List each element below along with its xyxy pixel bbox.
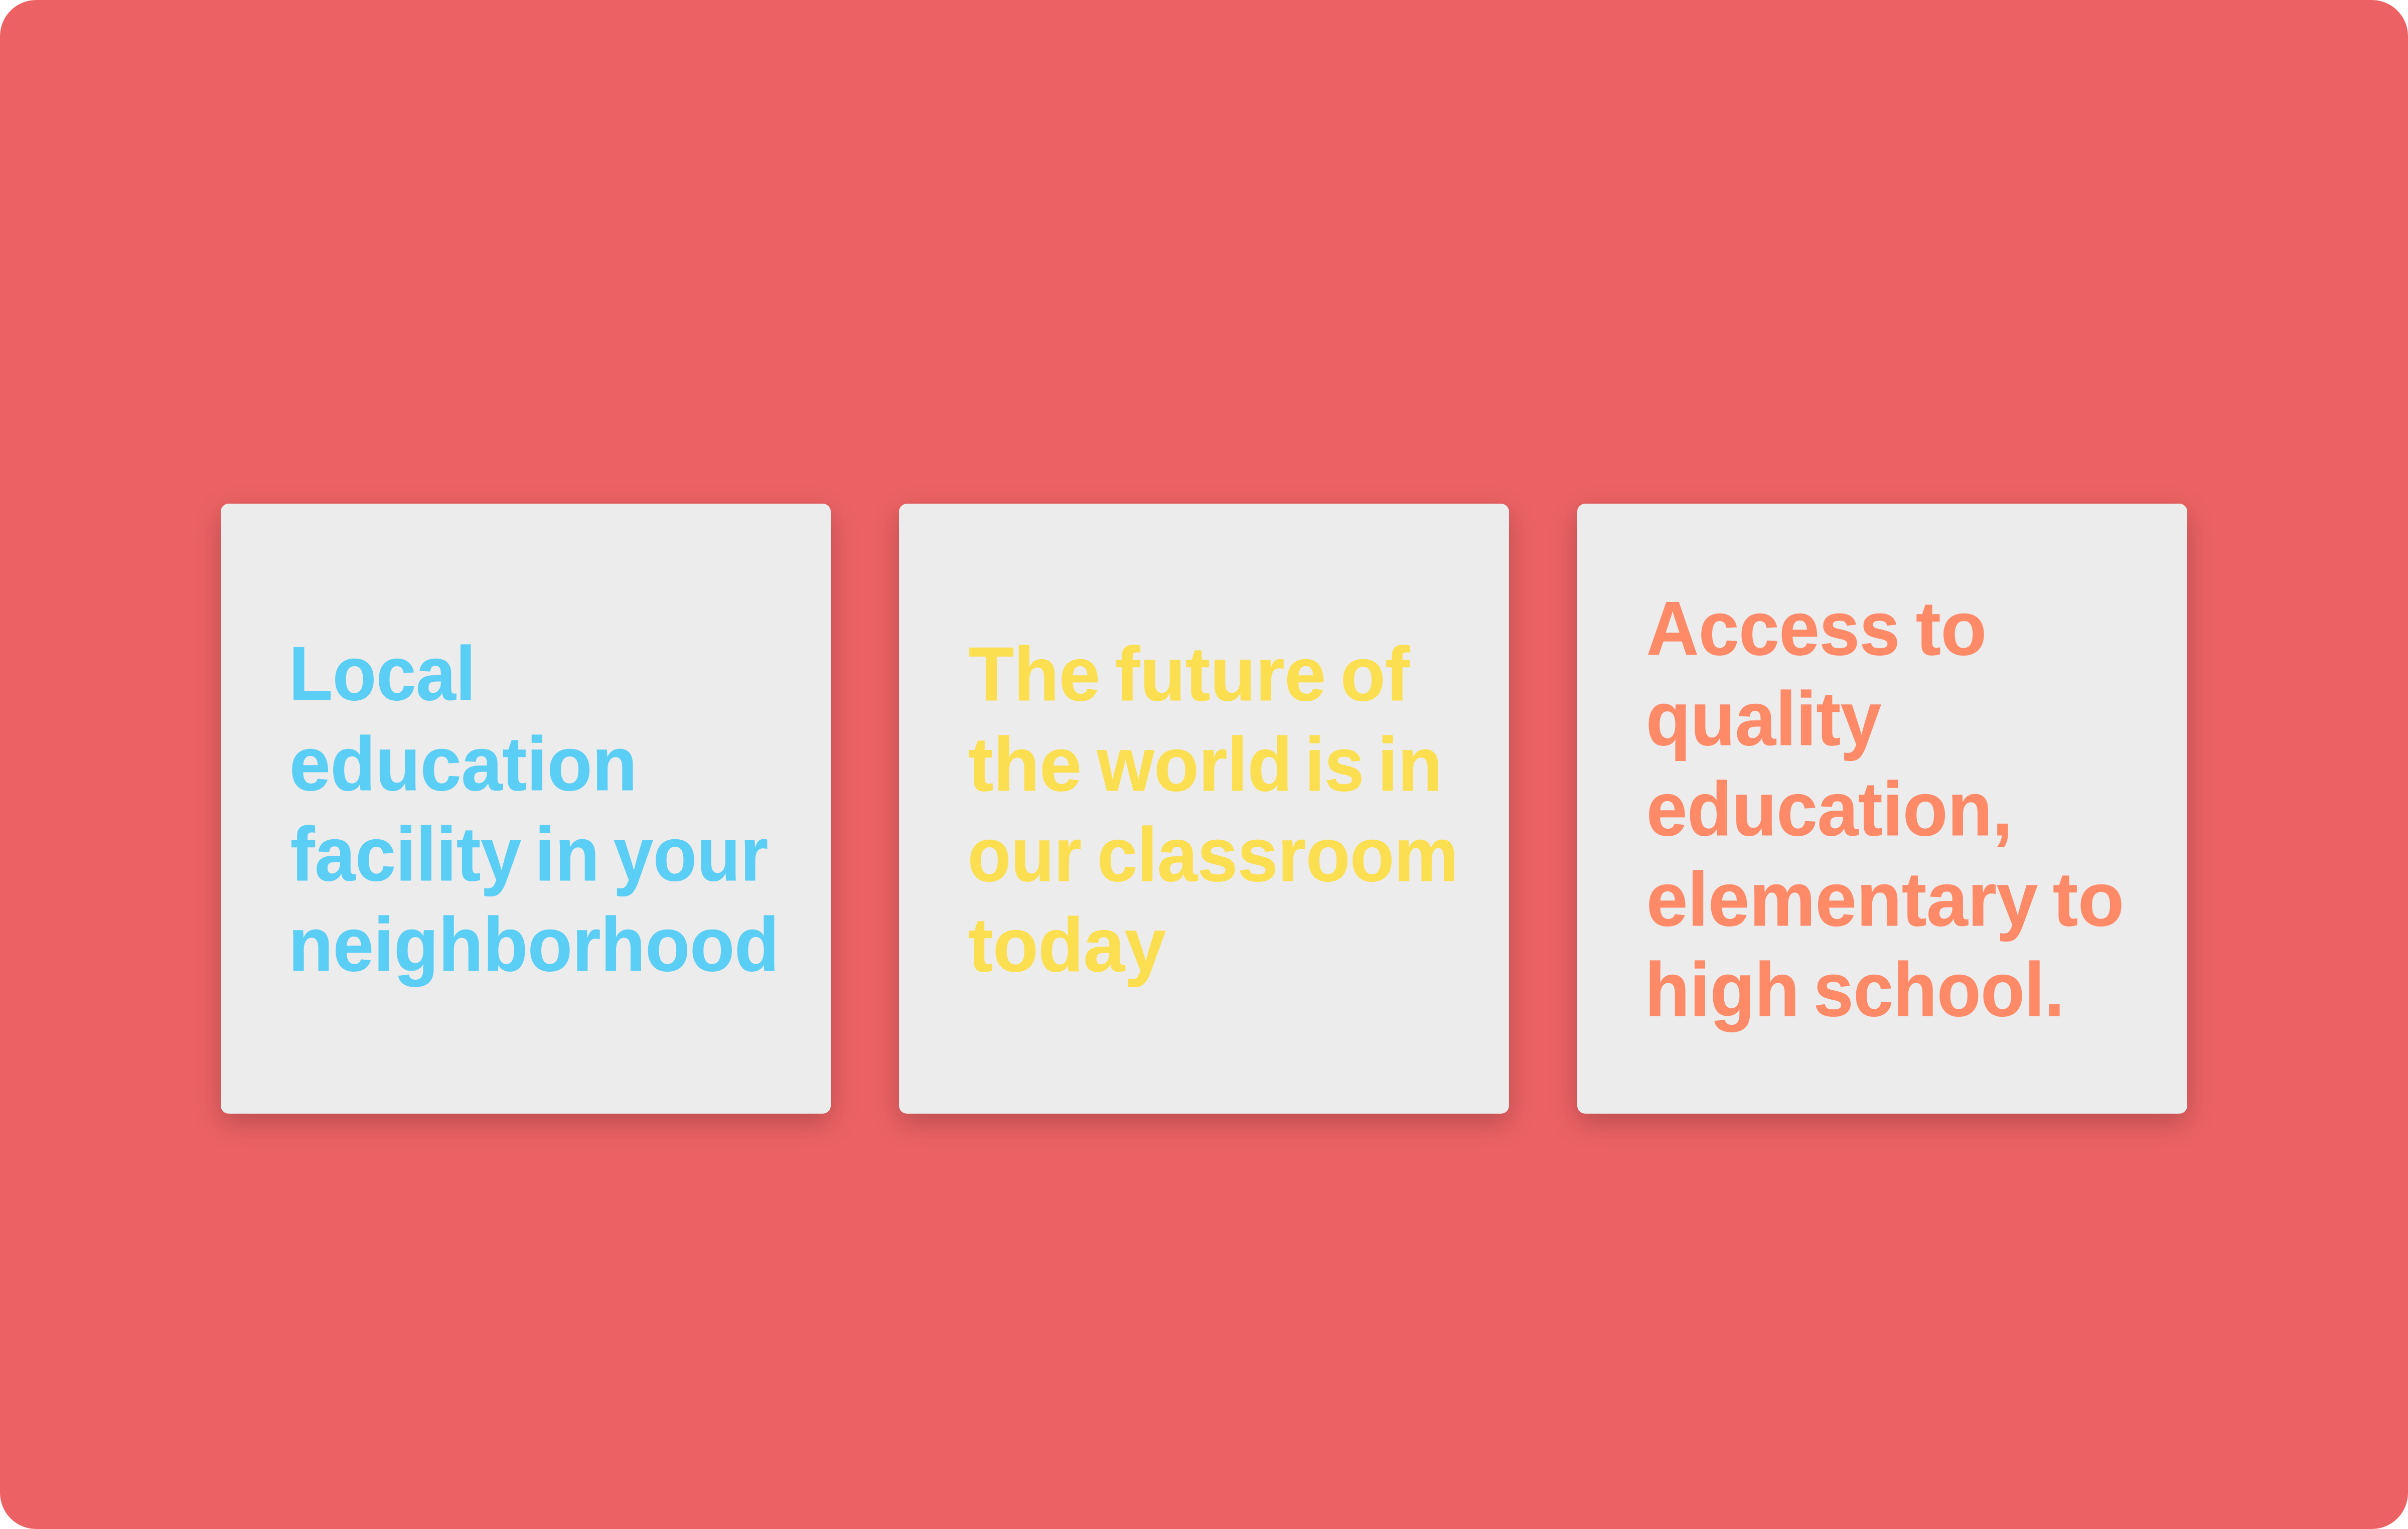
text block: the future of the world: today [968,902,1166,988]
text block: local education facility: facility [290,812,521,897]
panel: card 3 access to quality education [1577,504,2187,1114]
text block: local education facility: education [289,721,637,807]
text block: the future of the world: world [1097,722,1292,807]
text block: access to quality education: high [1645,947,1799,1032]
panel: card 1 local education [221,504,831,1114]
text block: access to quality education: Access [1646,586,1900,671]
text block: the future of the world: The [969,632,1100,717]
text block: the future of the world: future [1115,632,1326,717]
text block: local education facility: neighborhood [288,902,779,987]
text block: the future of the world: the [968,722,1082,807]
text block: access to quality education: to [1916,586,1987,671]
text block: the future of the world: our [968,812,1082,897]
text block: access to quality education: education, [1646,767,2013,852]
text block: access to quality education: elementary [1646,857,2038,942]
text block: the future of the world [968,632,1458,988]
text block: local education facility: in [535,812,599,897]
text block: local education facility: Local [289,631,476,716]
text block: the future of the world: of [1340,632,1410,717]
text block: local education facility: your [614,812,768,897]
text block: access to quality education [1645,586,2124,1032]
text block: the future of the world: in [1378,722,1442,807]
text block: local education facility [288,631,779,987]
text block: access to quality education: to [2053,857,2124,942]
panel: card 2 future of the world [899,504,1509,1114]
text block: access to quality education: school. [1814,947,2064,1032]
text block: the future of the world: classroom [1097,812,1458,897]
text block: access to quality education: quality [1646,676,1881,761]
text block: the future of the world: is [1305,722,1364,807]
